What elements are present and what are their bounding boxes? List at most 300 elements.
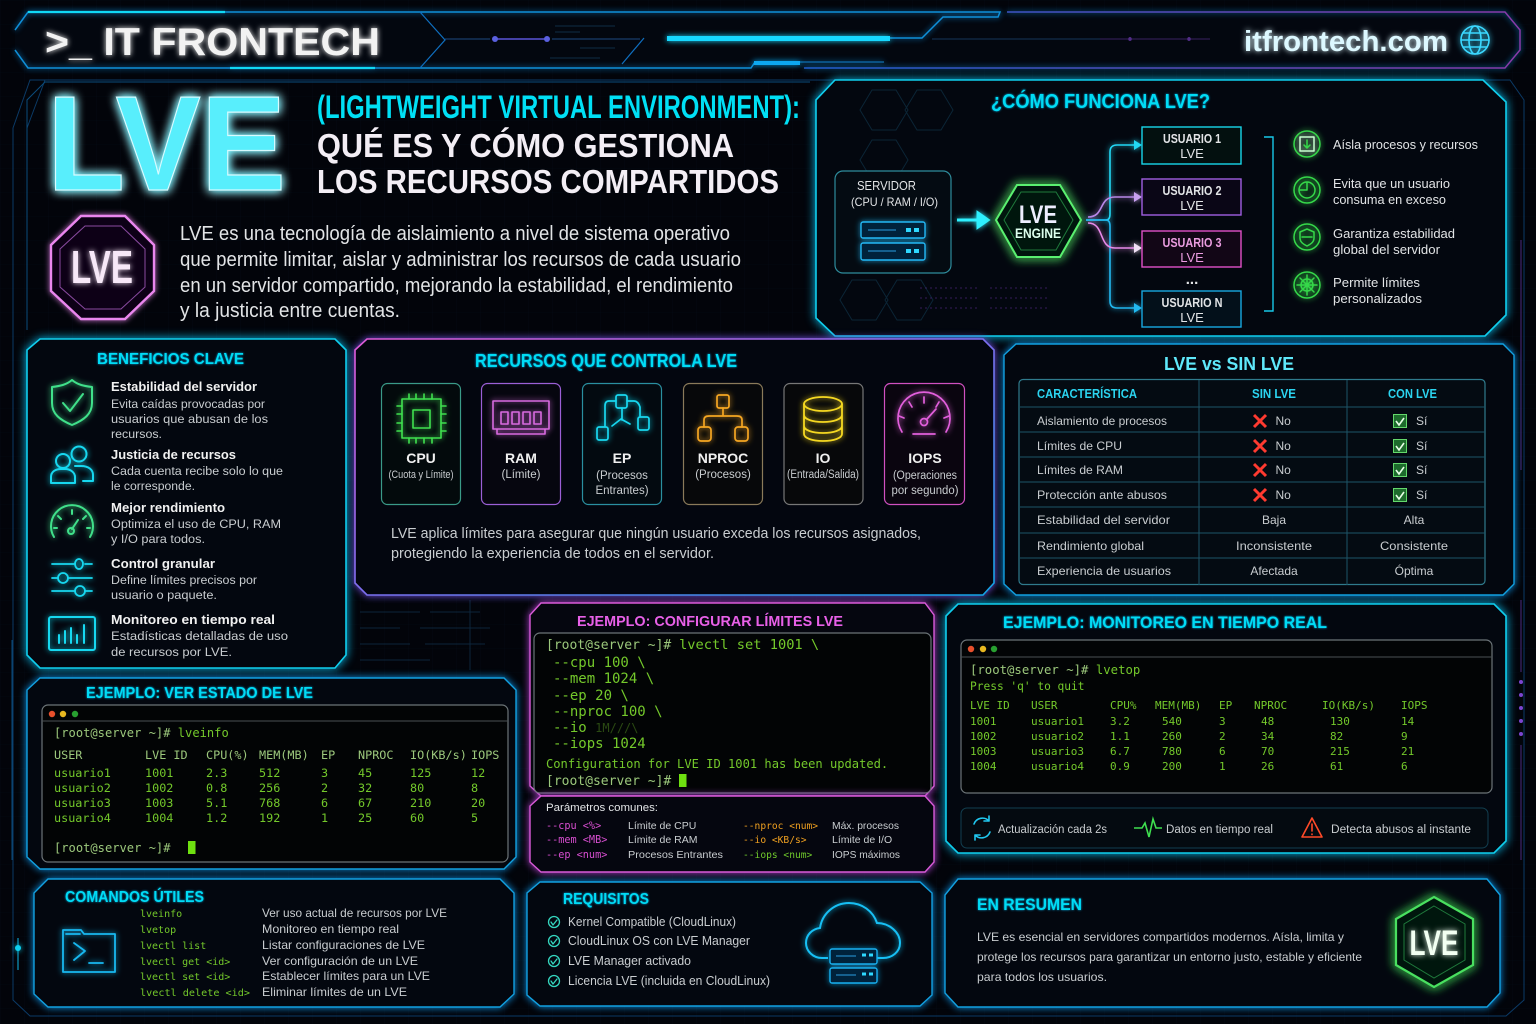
benefit: estabilidad: recursos.: [111, 427, 162, 441]
terminal window: [961, 640, 1492, 793]
table rows: 200: [1162, 760, 1182, 773]
intro paragraph: en un servidor compartido, mejorando la estabilidad, el rendimiento: [180, 275, 733, 297]
checklist text: Kernel Compatible (CloudLinux): [568, 915, 736, 929]
table rows: 80: [410, 781, 424, 795]
table rows: 61: [1330, 760, 1343, 773]
checklist text: CloudLinux OS con LVE Manager: [568, 934, 750, 948]
benefit: rendimiento: y I/O para todos.: [111, 532, 205, 546]
benefit: evita exceso: Evita que un usuario: [1333, 176, 1450, 191]
header lower accent bar: [754, 61, 800, 65]
heading: EJEMPLO: MONITOREO EN TIEMPO REAL: [1003, 614, 1327, 632]
command descriptions: [262, 906, 447, 999]
user box N: [1142, 291, 1241, 327]
card: IOPS: por segundo): [892, 485, 959, 497]
table rows: 125: [410, 766, 431, 780]
table rows: 192: [259, 811, 280, 825]
table header: SIN LVE: [1252, 387, 1296, 401]
icon: server: [861, 222, 925, 260]
terminal window: --mem 1024 \: [553, 671, 654, 687]
table rows: 45: [358, 766, 372, 780]
table rows: 1001: [970, 715, 996, 728]
sin LVE values: No: [1276, 414, 1291, 428]
user box 3: LVE: [1180, 250, 1204, 265]
terminal window: --cpu 100 \: [553, 655, 646, 671]
table rows: 130: [1330, 715, 1350, 728]
comparison table: [1019, 380, 1485, 585]
terminal window: --ep 20 \: [553, 688, 629, 704]
terminal window: Press 'q' to quit: [970, 680, 1085, 693]
parameter flags right: --nproc <num>: [743, 821, 818, 832]
sin LVE values: Afectada: [1250, 564, 1298, 578]
table rows: 1002: [970, 730, 996, 743]
table rows: usuario2: [54, 781, 111, 795]
server box: [835, 171, 951, 273]
table rows: usuario4: [1031, 760, 1084, 773]
card: RAM: RAM: [505, 450, 537, 466]
terminal window: [42, 705, 508, 862]
benefit: estabilidad: [111, 379, 268, 441]
heading: EJEMPLO: CONFIGURAR LÍMITES LVE: [577, 613, 843, 630]
table rows: 1004: [145, 811, 173, 825]
terminal window: --io 1M///\: [553, 720, 639, 736]
server box: (CPU / RAM / I/O): [851, 195, 938, 209]
site address: itfrontech.com: [1244, 26, 1448, 58]
command descriptions: Eliminar límites de un LVE: [262, 985, 407, 999]
terminal window: --nproc 100 \: [553, 704, 663, 720]
parameter descriptions left: Límite de RAM: [628, 834, 697, 846]
intro paragraph: [180, 223, 741, 322]
benefit: justicia: Justicia de recursos: [111, 447, 236, 462]
connectors: engine to users: [1086, 140, 1142, 313]
command descriptions: Ver configuración de un LVE: [262, 954, 418, 968]
arrow: server to engine: [957, 213, 988, 227]
table rows: [54, 766, 485, 825]
parameter descriptions left: [628, 820, 723, 861]
table rows: 48: [1261, 715, 1274, 728]
con LVE values: [1380, 414, 1448, 578]
ellipsis: ...: [1186, 271, 1198, 288]
command descriptions: Monitoreo en tiempo real: [262, 922, 399, 936]
table head: NPROC: [358, 748, 394, 762]
table rows: 34: [1261, 730, 1275, 743]
heading: REQUISITOS: [563, 891, 649, 908]
checklist text: Licencia LVE (incluida en CloudLinux): [568, 974, 770, 988]
table rows: usuario1: [54, 766, 111, 780]
heading: BENEFICIOS CLAVE: [97, 351, 244, 368]
table head: EP: [321, 748, 335, 762]
table rows: usuario2: [1031, 730, 1084, 743]
heading: EN RESUMEN: [977, 895, 1082, 914]
table head: IOPS: [1401, 699, 1428, 712]
table head: USER: [54, 748, 83, 762]
benefit: evita exceso: [1294, 176, 1450, 207]
summary text: LVE es esencial en servidores compartidos modernos. Aísla, limita y: [977, 930, 1344, 944]
card: CPU: [382, 384, 460, 504]
summary text: protege los recursos para garantizar un entorno justo, estable y eficiente: [977, 950, 1362, 964]
intro paragraph: que permite limitar, aislar y administrar los recursos de cada usuario: [180, 249, 741, 271]
table rows: usuario3: [54, 796, 111, 810]
panel: hero intro: [27, 68, 810, 330]
table rows: 3: [321, 766, 328, 780]
summary text: [977, 930, 1362, 984]
icon: chart: [49, 617, 95, 650]
green checks: [1394, 414, 1406, 502]
table header: CON LVE: [1388, 387, 1437, 401]
benefit: justicia: [111, 447, 283, 493]
row labels: Límites de RAM: [1037, 463, 1123, 477]
terminal window: --iops 1024: [553, 736, 646, 752]
table rows: 1.2: [206, 811, 227, 825]
icon: gauge: [51, 505, 93, 537]
sin LVE values: Baja: [1262, 513, 1286, 527]
card: IOPS: [884, 384, 964, 504]
table rows: 70: [1261, 745, 1274, 758]
logo text: >_ IT FRONTECH: [45, 21, 380, 64]
table rows: 6: [321, 796, 328, 810]
benefit: justicia: Cada cuenta recibe solo lo que: [111, 464, 283, 478]
row labels: Rendimiento global: [1037, 539, 1144, 553]
row labels: Límites de CPU: [1037, 439, 1122, 453]
table rows: 20: [471, 796, 485, 810]
user box 3: USUARIO 3: [1162, 235, 1222, 250]
intro paragraph: y la justicia entre cuentas.: [180, 300, 400, 322]
benefit: aisla procesos: Aísla procesos y recursos: [1333, 137, 1478, 152]
card: IO: [784, 384, 863, 504]
table rows: 0.9: [1110, 760, 1130, 773]
command names: lvectl set <id>: [140, 972, 230, 983]
terminal window: [root@server ~]#: [546, 774, 671, 789]
table head: EP: [1219, 699, 1233, 712]
table header: [1037, 386, 1437, 401]
table rows: 3: [1219, 715, 1226, 728]
card: EP: Entrantes): [595, 485, 649, 497]
parameter descriptions right: Límite de I/O: [832, 834, 892, 846]
table rows: 780: [1162, 745, 1182, 758]
con LVE values: Sí: [1416, 488, 1428, 502]
checklist icons: [548, 916, 560, 986]
icon: chip: [397, 394, 446, 443]
table rows: 1: [321, 811, 328, 825]
parameter flags left: --mem <MB>: [546, 835, 607, 846]
con LVE values: Sí: [1416, 439, 1428, 453]
heading: EJEMPLO: VER ESTADO DE LVE: [86, 685, 313, 702]
user box 1: [1142, 127, 1241, 164]
table rows: 210: [410, 796, 431, 810]
card: IOPS: (Operaciones: [893, 470, 957, 482]
command descriptions: Establecer límites para un LVE: [262, 969, 430, 983]
table rows: 14: [1401, 715, 1415, 728]
subtitle line 1: QUÉ ES Y CÓMO GESTIONA: [317, 127, 734, 164]
command names: [140, 909, 250, 999]
table rows: 256: [259, 781, 280, 795]
row labels: Experiencia de usuarios: [1037, 564, 1171, 578]
icon: speedometer: [898, 392, 950, 434]
monitor feature strip: Datos en tiempo real: [1166, 824, 1273, 836]
table rows: 6: [1401, 760, 1408, 773]
table rows: 260: [1162, 730, 1182, 743]
benefit: limites personalizados: [1294, 272, 1423, 306]
parameter flags right: --iops <num>: [743, 850, 813, 861]
table rows: 5: [471, 811, 478, 825]
table rows: 0.8: [206, 781, 227, 795]
benefit: estabilidad: Garantiza estabilidad: [1333, 226, 1455, 241]
icon: pulse: [1134, 819, 1162, 837]
benefit: estabilidad: [1294, 224, 1455, 257]
LVE green hexagon badge: [1396, 897, 1473, 987]
row labels: Aislamiento de procesos: [1037, 414, 1167, 428]
table rows: 12: [471, 766, 485, 780]
user box 1: LVE: [1180, 146, 1204, 161]
panel: parametros comunes: [530, 796, 934, 872]
intro paragraph: LVE es una tecnología de aislaimiento a nivel de sistema operativo: [180, 223, 730, 245]
parameter flags left: [546, 821, 607, 861]
table rows: 2.3: [206, 766, 227, 780]
panel: ejemplo monitoreo: [946, 604, 1506, 853]
benefit: control: usuario o paquete.: [111, 588, 217, 602]
benefit: rendimiento: Optimiza el uso de CPU, RAM: [111, 517, 281, 531]
panel: ejemplo configurar limites: [530, 603, 934, 796]
user box 2: LVE: [1180, 198, 1204, 213]
command names: lvectl get <id>: [140, 957, 230, 968]
table rows: 82: [1330, 730, 1343, 743]
table rows: 512: [259, 766, 280, 780]
card: NPROC: [684, 384, 762, 504]
card: RAM: [482, 384, 560, 504]
monitor feature strip: Detecta abusos al instante: [1331, 824, 1471, 836]
parameter flags right: [743, 821, 818, 861]
parameter flags right: --io <KB/s>: [743, 835, 807, 846]
benefit: evita exceso: consuma en exceso: [1333, 192, 1446, 207]
sin LVE values: No: [1276, 463, 1291, 477]
card: CPU: (Cuota y Límite): [388, 469, 454, 481]
benefit: estabilidad: Estabilidad del servidor: [111, 379, 257, 394]
panel: beneficios clave: [27, 339, 346, 668]
command names: lvetop: [140, 925, 176, 936]
terminal window: [root@server ~]# lvetop: [970, 663, 1140, 677]
command names: lvectl list: [140, 941, 206, 952]
icon: refresh: [974, 816, 990, 840]
card: EP: (Procesos: [596, 470, 648, 482]
big LVE title: LVE: [47, 68, 286, 219]
table rows: 1003: [145, 796, 173, 810]
checklist text: [568, 915, 770, 988]
table head: MEM(MB): [259, 748, 309, 762]
command descriptions: Listar configuraciones de LVE: [262, 938, 425, 952]
table rows: 1004: [970, 760, 997, 773]
table rows: 1003: [970, 745, 996, 758]
table rows: 6.7: [1110, 745, 1130, 758]
parameter descriptions left: Procesos Entrantes: [628, 849, 723, 861]
table rows: usuario3: [1031, 745, 1084, 758]
parameter descriptions left: Límite de CPU: [628, 820, 696, 832]
table rows: usuario1: [1031, 715, 1084, 728]
terminal window: [root@server ~]# lvectl set 1001 \: [546, 637, 819, 653]
benefit: control: Control granular: [111, 556, 215, 571]
parameter descriptions right: IOPS máximos: [832, 849, 900, 861]
benefit: monitoreo: de recursos por LVE.: [111, 645, 232, 659]
icon: sliders: [52, 559, 92, 596]
table head: LVE ID: [145, 748, 188, 762]
icon: nodes: [597, 395, 649, 440]
parameter descriptions right: Máx. procesos: [832, 820, 899, 832]
icon: database: [804, 397, 842, 441]
explanation text: LVE aplica límites para asegurar que ningún usuario exceda los recursos asignados,: [391, 526, 921, 542]
table rows: 3.2: [1110, 715, 1130, 728]
table head: NPROC: [1254, 699, 1287, 712]
con LVE values: Alta: [1404, 513, 1425, 527]
panel: requisitos: [527, 882, 932, 1006]
sin LVE values: [1236, 414, 1312, 578]
table rows: 768: [259, 796, 280, 810]
table head: CPU%: [1110, 699, 1137, 712]
table rows: 540: [1162, 715, 1182, 728]
panel: en resumen: [945, 879, 1500, 1007]
monitor feature strip: Actualización cada 2s: [998, 824, 1107, 836]
panel: ejemplo ver estado: [27, 678, 516, 869]
sin LVE values: No: [1276, 439, 1291, 453]
parameter flags left: --cpu <%>: [546, 821, 601, 832]
server box: SERVIDOR: [857, 178, 916, 193]
benefit: aisla procesos: [1294, 131, 1478, 157]
card: EP: EP: [613, 450, 631, 466]
parameter descriptions right: [832, 820, 900, 861]
user box 2: USUARIO 2: [1162, 183, 1222, 198]
card: IO: (Entrada/Salida): [787, 469, 859, 481]
user box 2: [1142, 179, 1241, 215]
panel: parametros comunes: Parámetros comunes:: [546, 802, 658, 814]
subtitle acronym: (LIGHTWEIGHT VIRTUAL ENVIRONMENT):: [317, 89, 800, 125]
table rows: [970, 715, 1415, 773]
table rows: 67: [358, 796, 372, 810]
icon: memory: [493, 401, 549, 434]
command descriptions: Ver uso actual de recursos por LVE: [262, 906, 447, 920]
heading: LVE vs SIN LVE: [1164, 354, 1294, 374]
benefit: monitoreo: [111, 612, 288, 659]
LVE octagon badge: LVE: [71, 241, 133, 293]
icon: cloud server: [806, 903, 900, 983]
panel: como funciona: [816, 80, 1506, 336]
explanation text: [391, 526, 921, 562]
benefit: estabilidad: usuarios que abusan de los: [111, 412, 268, 426]
card: NPROC: NPROC: [698, 450, 748, 466]
table rows: 215: [1330, 745, 1350, 758]
panel: comandos utiles: [34, 879, 514, 1007]
user box N: LVE: [1180, 310, 1204, 325]
benefit: rendimiento: Mejor rendimiento: [111, 500, 225, 515]
icon: shield: [52, 380, 92, 425]
LVE engine hexagon: [996, 185, 1081, 257]
table rows: 1001: [145, 766, 173, 780]
user box N: USUARIO N: [1162, 295, 1222, 310]
table rows: 2: [321, 781, 328, 795]
benefit: limites personalizados: Permite límites: [1333, 275, 1420, 290]
table rows: 1002: [145, 781, 173, 795]
parameter flags left: --ep <num>: [546, 850, 607, 861]
row labels: Estabilidad del servidor: [1037, 513, 1170, 527]
benefit: estabilidad: Evita caídas provocadas por: [111, 397, 265, 411]
table rows: 5.1: [206, 796, 227, 810]
con LVE values: Sí: [1416, 414, 1428, 428]
user box 1: USUARIO 1: [1163, 131, 1221, 146]
table rows: 8: [471, 781, 478, 795]
table rows: 21: [1401, 745, 1414, 758]
sin LVE values: Inconsistente: [1236, 539, 1312, 553]
table header: CARACTERÍSTICA: [1037, 386, 1137, 401]
table head: LVE ID: [970, 699, 1010, 712]
con LVE values: Sí: [1416, 463, 1428, 477]
red crosses: [1254, 415, 1266, 501]
terminal window: [534, 633, 931, 793]
card: EP: [582, 384, 662, 504]
row labels: Protección ante abusos: [1037, 488, 1167, 502]
card: RAM: (Límite): [502, 469, 541, 481]
table rows: 60: [410, 811, 424, 825]
heading: RECURSOS QUE CONTROLA LVE: [475, 351, 737, 371]
benefit: control: [111, 556, 257, 602]
benefit: limites personalizados: personalizados: [1333, 291, 1423, 306]
card: NPROC: (Procesos): [695, 469, 751, 481]
command names: lvectl delete <id>: [140, 988, 250, 999]
row labels: [1037, 414, 1171, 578]
table rows: 1.1: [1110, 730, 1130, 743]
header bar: [15, 12, 1520, 68]
table rows: 32: [358, 781, 372, 795]
checklist text: LVE Manager activado: [568, 954, 691, 968]
con LVE values: Óptima: [1395, 563, 1434, 578]
sin LVE values: No: [1276, 488, 1291, 502]
table rows: 1: [1219, 760, 1226, 773]
card: IO: IO: [816, 450, 830, 466]
benefit: monitoreo: Monitoreo en tiempo real: [111, 612, 275, 627]
table rows: 6: [1219, 745, 1226, 758]
LVE engine hexagon: LVE: [1019, 201, 1057, 229]
con LVE values: Consistente: [1380, 539, 1448, 553]
summary text: para todos los usuarios.: [977, 970, 1107, 984]
table head: IO(KB/s): [410, 748, 467, 762]
table rows: usuario4: [54, 811, 111, 825]
user box 3: [1142, 231, 1241, 267]
panel: recursos que controla: [355, 339, 994, 595]
LVE green hexagon badge: LVE: [1410, 924, 1458, 963]
card: IOPS: IOPS: [908, 450, 942, 466]
benefit: rendimiento: [111, 500, 281, 546]
table rows: 2: [1219, 730, 1226, 743]
explanation text: protegiendo la experiencia de todos en el servidor.: [391, 546, 714, 562]
table head: IO(KB/s): [1322, 699, 1375, 712]
subtitle line 2: LOS RECURSOS COMPARTIDOS: [317, 163, 779, 200]
icon: globe: [1461, 26, 1489, 54]
icon: warning: [1302, 818, 1322, 837]
benefit: monitoreo: Estadísticas detalladas de uso: [111, 629, 288, 643]
header glowing accent line: [667, 36, 890, 41]
terminal window: Configuration for LVE ID 1001 has been updated.: [546, 757, 888, 771]
table head: USER: [1031, 699, 1058, 712]
icon: terminal folder: [63, 930, 115, 972]
benefit: estabilidad: global del servidor: [1333, 242, 1441, 257]
terminal window: [root@server ~]# lveinfo: [54, 726, 229, 740]
panel: LVE vs sin LVE: [1004, 344, 1514, 595]
table rows: 26: [1261, 760, 1274, 773]
heading: ¿CÓMO FUNCIONA LVE?: [991, 89, 1210, 113]
icon: process tree: [698, 395, 748, 441]
table rows: 9: [1401, 730, 1408, 743]
monitor feature strip: [961, 808, 1488, 848]
table rows: 25: [358, 811, 372, 825]
benefit: justicia: le corresponde.: [111, 479, 195, 493]
terminal window: [root@server ~]#: [54, 841, 171, 855]
command names: lveinfo: [140, 909, 182, 920]
table head: CPU(%): [206, 748, 249, 762]
